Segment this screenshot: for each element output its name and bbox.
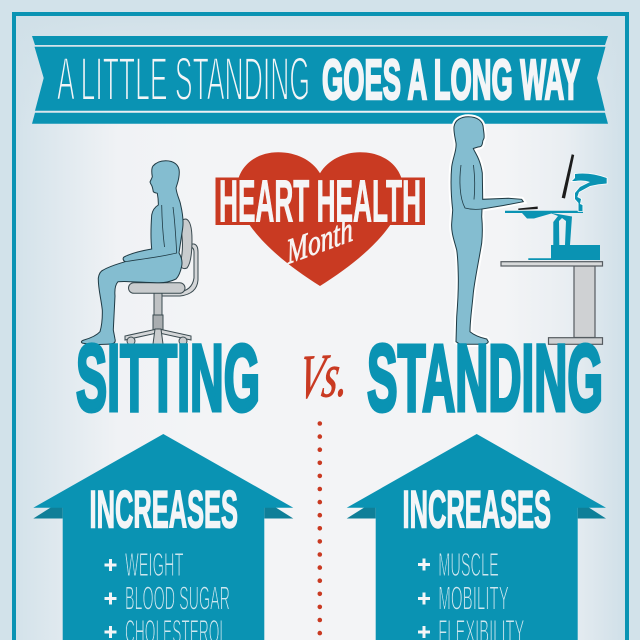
sitting figure with office chair bbox=[81, 161, 198, 346]
panel: standing increases arrow: MUSCLE bbox=[438, 546, 499, 583]
panel: sitting increases arrow: WEIGHT bbox=[125, 546, 184, 583]
teal riser bbox=[505, 211, 600, 260]
list item: muscle bbox=[418, 546, 499, 583]
heart health label bbox=[216, 168, 425, 234]
arrow body bbox=[347, 434, 606, 640]
office chair bbox=[125, 219, 198, 346]
keyboard bbox=[518, 206, 538, 210]
panel: standing increases arrow bbox=[347, 434, 606, 640]
list item: flexibility bbox=[418, 613, 524, 640]
versus script: Vs. bbox=[294, 339, 355, 412]
panel: sitting increases arrow: BLOOD SUGAR bbox=[125, 579, 230, 616]
heart health badge bbox=[216, 152, 425, 286]
arrow body bbox=[33, 434, 293, 640]
panel: sitting increases arrow bbox=[33, 434, 293, 640]
title banner: A LITTLE STANDING bbox=[57, 45, 310, 113]
seated arm outline bbox=[125, 205, 177, 262]
desk top, column and base bbox=[501, 262, 602, 344]
panel: sitting increases arrow: INCREASES bbox=[90, 480, 238, 540]
list item: cholesterol bbox=[104, 613, 227, 640]
arrow folds bbox=[347, 507, 606, 518]
panel: standing increases arrow: MOBILITY bbox=[438, 579, 509, 616]
text: SITTING bbox=[76, 326, 260, 432]
arrow folds bbox=[33, 507, 293, 518]
list item: mobility bbox=[418, 579, 509, 616]
dotted divider bbox=[318, 421, 322, 635]
list item: blood sugar bbox=[104, 579, 230, 616]
heart shape bbox=[237, 152, 403, 286]
month script: Month bbox=[284, 210, 355, 272]
standing desk with monitor bbox=[501, 154, 607, 344]
seated body bbox=[81, 161, 183, 345]
standing figure bbox=[451, 117, 523, 344]
monitor screen bbox=[562, 154, 574, 198]
standing arm outline bbox=[460, 165, 482, 209]
list item: weight bbox=[104, 546, 184, 583]
monitor arm bbox=[572, 174, 607, 211]
